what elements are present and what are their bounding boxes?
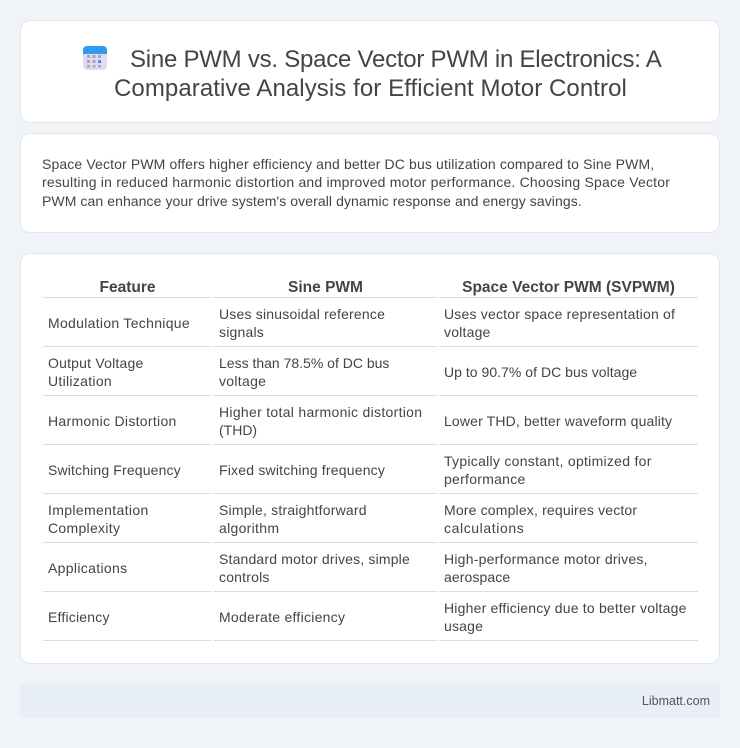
intro text: Space Vector PWM offers higher efficiency and better DC bus utilization compared to Sine PWM,	[42, 156, 654, 172]
row: modulation technique: voltage	[444, 324, 491, 340]
title: Sine PWM vs. Space Vector PWM in Electronics: A	[130, 46, 662, 73]
row: output voltage utilization: Output Voltage	[48, 355, 143, 371]
row: harmonic distortion: (THD)	[219, 422, 257, 438]
row: modulation technique: Uses sinusoidal reference	[219, 306, 385, 322]
row: switching frequency	[48, 453, 652, 487]
row: implementation complexity: Simple, straightforward	[219, 502, 367, 518]
table header: Space Vector PWM (SVPWM)	[462, 279, 675, 296]
row: applications: controls	[219, 569, 270, 585]
row: output voltage utilization: voltage	[219, 373, 266, 389]
row: switching frequency: Switching Frequency	[48, 462, 181, 478]
table header	[100, 279, 675, 296]
intro text: PWM can enhance your drive system's overall dynamic response and energy savings.	[42, 193, 582, 209]
row: switching frequency: performance	[444, 471, 526, 487]
row: harmonic distortion: Higher total harmonic distortion	[219, 404, 422, 420]
row: harmonic distortion: Lower THD, better waveform quality	[444, 413, 672, 429]
row: output voltage utilization: Less than 78.5% of DC bus	[219, 355, 389, 371]
row: implementation complexity: calculations	[444, 520, 524, 536]
title: Comparative Analysis for Efficient Motor Control	[114, 75, 627, 102]
row: harmonic distortion: Harmonic Distortion	[48, 413, 177, 429]
table	[43, 279, 698, 641]
intro text: resulting in reduced harmonic distortion and improved motor performance. Choosing Space Vector	[42, 174, 670, 190]
table header: Sine PWM	[288, 279, 363, 296]
table header: Feature	[100, 279, 156, 296]
header panel	[20, 20, 720, 123]
title	[114, 46, 662, 102]
row: harmonic distortion	[48, 404, 672, 438]
row: output voltage utilization: Utilization	[48, 373, 112, 389]
row: switching frequency: Typically constant, optimized for	[444, 453, 652, 469]
row: switching frequency: Fixed switching frequency	[219, 462, 385, 478]
row: implementation complexity: Complexity	[48, 520, 120, 536]
row: applications: High-performance motor drives,	[444, 551, 648, 567]
intro panel	[20, 133, 720, 233]
row: efficiency: usage	[444, 618, 483, 634]
footer credit: Libmatt.com	[642, 694, 710, 708]
row: applications: Standard motor drives, simple	[219, 551, 410, 567]
row: applications: Applications	[48, 560, 127, 576]
icon: calendar	[83, 46, 107, 70]
row: implementation complexity: More complex, requires vector	[444, 502, 637, 518]
comparison table panel	[20, 253, 720, 664]
row: efficiency: Moderate efficiency	[219, 609, 345, 625]
row: output voltage utilization: Up to 90.7% of DC bus voltage	[444, 364, 637, 380]
intro text	[42, 156, 670, 209]
row: modulation technique: Uses vector space representation of	[444, 306, 675, 322]
row: implementation complexity: Implementation	[48, 502, 149, 518]
row: modulation technique	[48, 306, 675, 340]
row: applications: aerospace	[444, 569, 510, 585]
row: implementation complexity: algorithm	[219, 520, 279, 536]
row: applications	[48, 551, 648, 585]
row: modulation technique: Modulation Technique	[48, 315, 190, 331]
row: efficiency	[48, 600, 687, 634]
row: efficiency: Higher efficiency due to better voltage	[444, 600, 687, 616]
row: modulation technique: signals	[219, 324, 264, 340]
footer	[20, 684, 720, 718]
row: implementation complexity	[48, 502, 637, 536]
row: efficiency: Efficiency	[48, 609, 110, 625]
row: output voltage utilization	[48, 355, 637, 389]
